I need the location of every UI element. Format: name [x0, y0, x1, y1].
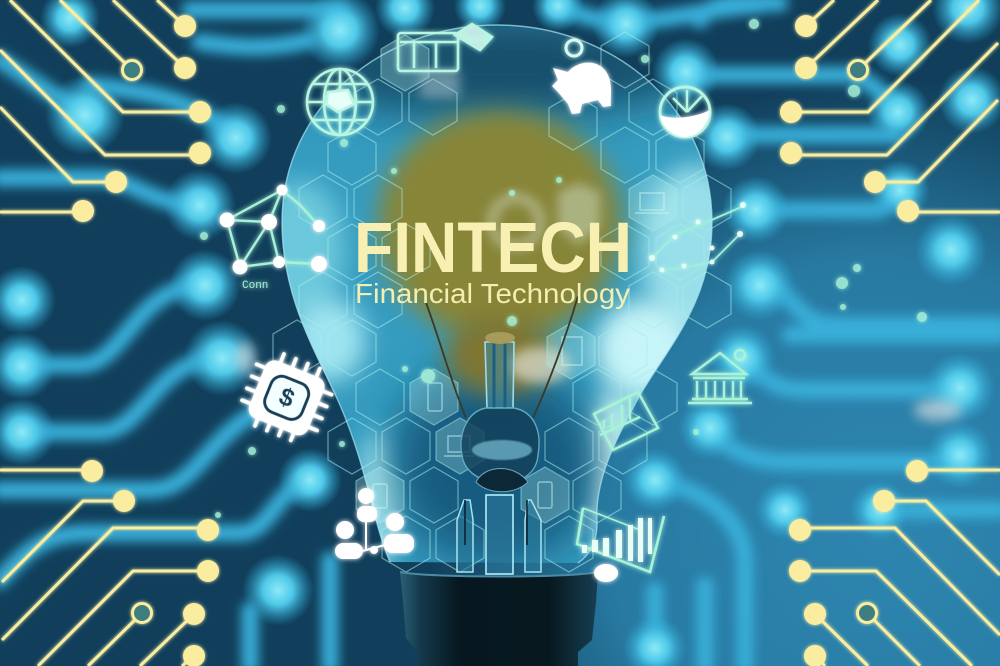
glass bulge: [461, 408, 539, 483]
icon: rising bar chart: [577, 508, 664, 582]
light bulb: [281, 24, 713, 564]
blurred smudges in background: [235, 342, 962, 421]
device glyphs: [373, 193, 669, 508]
icon: bank building: [688, 350, 752, 403]
icon: connected network: [220, 184, 327, 292]
filament glass stem: [425, 296, 578, 574]
connector nodes: [72, 15, 211, 222]
icon: piggy bank: [552, 40, 611, 114]
dollar sign: $: [275, 382, 299, 413]
hexagon grid overlay: [273, 32, 731, 572]
icon: line graphs: [649, 202, 746, 272]
glass tube: [485, 342, 514, 408]
stem legs: [457, 500, 473, 572]
blurred icons inside bulb: [420, 70, 600, 246]
icon: globe: [307, 69, 373, 135]
title: FINTECH: FINTECH: [354, 209, 632, 288]
connector nodes: [81, 460, 219, 666]
icon: folder and envelope: [398, 24, 492, 71]
circuit lines: top left: [0, 0, 211, 222]
subtitle: Financial Technology: Financial Technology: [355, 278, 630, 309]
circuit lines: top right: [780, 0, 1000, 222]
icon: people: [335, 488, 414, 559]
icon: dollar chip: [235, 346, 339, 448]
bulb glass fill: [282, 25, 712, 563]
screw base: [400, 572, 598, 666]
filled hexagons with device icons: [356, 35, 677, 523]
connector nodes: [780, 15, 919, 222]
circuit lines: bottom right: [789, 460, 1000, 666]
bulb outline: [282, 25, 712, 563]
connector nodes: [789, 460, 928, 666]
network label: Conn: [242, 280, 268, 292]
icon: pie chart: [660, 87, 710, 137]
scattered glowing dots: [200, 19, 927, 518]
icon: document chart: [594, 392, 658, 450]
support wires: [425, 296, 578, 418]
circuit lines: bottom left: [0, 460, 219, 666]
